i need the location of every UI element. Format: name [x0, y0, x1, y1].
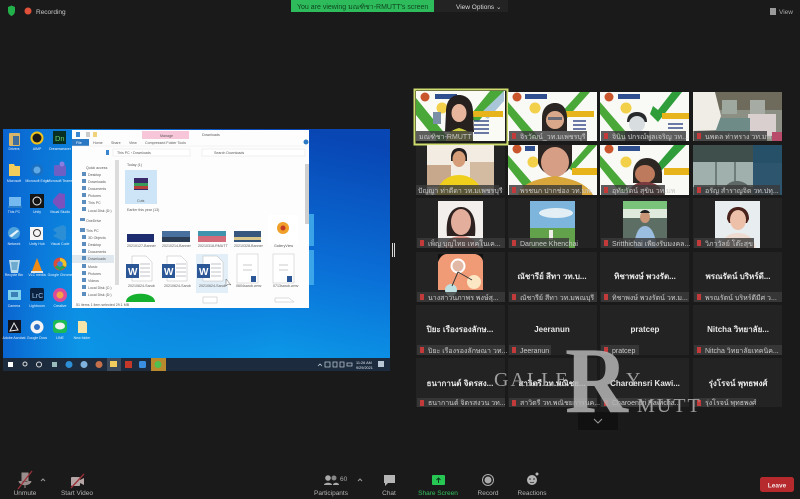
icon: security shield	[8, 6, 15, 16]
desktop icon labels: Visual Code	[51, 242, 69, 246]
ribbon: Share	[111, 141, 121, 145]
desktop icon labels: Adobe Acrobat	[3, 336, 26, 340]
view options button: View Options ⌄	[456, 4, 501, 11]
watermark: Gallery RMUTT	[494, 329, 702, 433]
watermark: Gallery RMUTT: Y	[626, 369, 640, 391]
participant names: จินิน ปกรณ์พูลเจริญ วท...	[612, 133, 688, 141]
navigation sidebar: Videos	[88, 279, 99, 283]
desktop icon labels: Camera	[8, 304, 20, 308]
desktop icon labels: Lightroom	[29, 304, 45, 308]
image thumbnails: 20210328-Banner	[234, 244, 264, 248]
navigation sidebar: 3D Objects	[88, 236, 106, 240]
participant names: พรณรัตน์ บริหร์ดีมีศ ว...	[705, 294, 777, 302]
control: participants: 60	[340, 476, 348, 483]
ribbon: Compressed Folder Tools	[145, 141, 186, 145]
navigation sidebar: Downloads	[88, 180, 106, 184]
address bar: Search Downloads	[214, 151, 244, 155]
image thumbnails: GalleryView	[274, 244, 294, 248]
desktop icon labels: Microsoft Edge	[25, 179, 49, 183]
gallery next page button	[578, 412, 618, 430]
image thumbnails	[127, 215, 298, 248]
participant names: นพดล ท่าทราง วท.มพ	[705, 134, 771, 141]
participant names: ธนากานต์ จิตรสงวน วท...	[428, 399, 506, 407]
control: participants: Participants	[314, 490, 349, 497]
recording label: Recording	[36, 9, 66, 16]
tile: man with mask	[600, 92, 689, 141]
address bar	[72, 146, 309, 156]
navigation sidebar: Local Disk (D:)	[88, 209, 112, 213]
document thumbnails	[126, 254, 299, 293]
participant names: นางสาวนภาพร พงษ์สุ...	[428, 294, 499, 302]
file explorer window	[72, 130, 309, 308]
tile: room with white shirt	[693, 92, 782, 141]
large participant names: Charoensri Kawi...	[610, 379, 680, 388]
participant names: ปัญญา ท่าดีดา วท.มเพชรบุรี	[418, 187, 503, 195]
participant names	[418, 133, 779, 407]
desktop icon labels: This PC	[8, 210, 21, 214]
watermark: Gallery RMUTT: MUTT	[637, 395, 702, 417]
navigation sidebar: Desktop	[88, 173, 101, 177]
large participant names: ธนากานต์ จิตรสง...	[427, 378, 493, 388]
desktop icon labels: New folder	[74, 336, 91, 340]
control: unmute	[14, 471, 45, 497]
navigation sidebar: This PC	[86, 229, 99, 233]
desktop wallpaper	[3, 129, 390, 358]
desktop icons: LrC	[32, 293, 43, 300]
panel: participant gallery	[414, 90, 782, 407]
large participant names: ปิยะ เรืองรองลักษ...	[426, 324, 493, 334]
desktop icon labels: Google Chrome	[48, 273, 72, 277]
desktop icon labels: LINE	[56, 336, 65, 340]
document thumbnails: 0604sarub.wmv	[236, 284, 262, 288]
ribbon: Downloads	[202, 133, 220, 137]
control: start video	[61, 474, 93, 497]
file group: today: Cuts	[137, 199, 145, 203]
tile: window room	[693, 145, 782, 195]
document thumbnails: W	[164, 267, 174, 278]
large participant names: ทิชาพงษ์ พวงรัต...	[614, 271, 676, 281]
document thumbnails: 0713sarub.wmv	[273, 284, 299, 288]
participant names: ปิยะ เรืองรองลักษณา วท...	[428, 347, 507, 355]
participant names: อุทัยรัตน์ สุขิน วท.มพ	[612, 187, 676, 195]
control: chat	[382, 475, 396, 497]
navigation sidebar: This PC	[88, 201, 101, 205]
large participant names: รุ่งโรจน์ พุทธพงศ์	[709, 378, 768, 389]
control: reactions: Reactions	[518, 490, 547, 497]
participant names: ทิชาพงษ์ พวงรัตน์ วท.ม...	[612, 294, 688, 302]
icon: recording dot	[24, 8, 32, 14]
document thumbnails: W	[199, 267, 209, 278]
ribbon: Manage	[160, 134, 173, 138]
panel divider handle	[392, 243, 394, 257]
navigation sidebar: Music	[88, 265, 98, 269]
navigation sidebar: Local Disk (D:)	[88, 293, 112, 297]
desktop icon labels: Network	[8, 242, 21, 246]
ribbon: View	[129, 141, 137, 145]
participant names: Sritthichai เพียงรับมงคล...	[612, 240, 690, 248]
participant names: Charoensri Kawicha...	[612, 400, 681, 407]
file group: today	[125, 163, 159, 212]
ribbon: Home	[93, 141, 103, 145]
tile: woman with glasses in red	[600, 144, 689, 195]
tile: man in blue shirt	[623, 201, 667, 248]
ribbon: File	[76, 141, 82, 145]
navigation sidebar: Documents	[88, 187, 106, 191]
control: reactions	[518, 472, 547, 497]
large participant names	[426, 271, 770, 389]
scrollbar	[305, 164, 309, 224]
control: record: Record	[478, 490, 499, 497]
control: share screen: Share Screen	[418, 490, 458, 497]
desktop icon labels: Drivers	[8, 147, 20, 151]
participant names: อรัญ สำราญจิต วท.ปทุ...	[705, 187, 779, 195]
navigation sidebar: Documents	[88, 250, 106, 254]
desktop icon labels: VLC media	[28, 273, 46, 277]
desktop icon labels: Creative	[53, 304, 67, 308]
desktop icon labels	[3, 147, 91, 340]
participant names: จิรวัฒน์_วท.มเพชรบุรี	[520, 133, 586, 141]
participant names: Darunee Khenchai	[520, 241, 578, 248]
desktop icon labels: Unity	[33, 210, 41, 214]
participant names: วิภาวัลย์ โต๊ะสุข	[705, 239, 753, 248]
tile: man in yellow shirt	[427, 145, 494, 195]
control: start video: Start Video	[61, 490, 93, 497]
tile backgrounds	[416, 92, 782, 407]
desktop icon labels: AIMP	[33, 147, 42, 151]
viewing banner: You are viewing มณฑิชา-RMUTT's screen	[297, 3, 428, 11]
participant names: สาวิตรี วท.พณิชยการนค...	[520, 399, 600, 407]
document thumbnails: W	[128, 267, 138, 278]
large participant names: Jeeranun	[534, 325, 570, 334]
viewing banner	[291, 0, 434, 12]
address bar: This PC › Downloads	[117, 151, 151, 155]
control: leave button	[760, 477, 794, 492]
document thumbnails: 20210624-Sarub	[164, 284, 191, 288]
tile: close-up woman in yellow	[508, 144, 597, 195]
tile: rice field photo	[530, 201, 575, 248]
view options button	[434, 0, 508, 12]
participant names: รุ่งโรจน์ พุทธพงศ์	[705, 398, 757, 407]
control: participants	[314, 475, 362, 497]
desktop icon labels: Dreamweaver	[49, 147, 72, 151]
participant names: pratcep	[612, 348, 635, 355]
windows taskbar	[3, 358, 390, 371]
large participant names: pratcep	[631, 325, 660, 334]
desktop icons	[8, 131, 87, 334]
navigation sidebar: Pictures	[88, 272, 101, 276]
file group: today: Today (1)	[127, 163, 142, 167]
document thumbnails: 20210624-Sarub	[199, 284, 226, 288]
large participant names: สาวิตรี วท.พณิชย...	[518, 378, 586, 388]
navigation sidebar: Local Disk (C:)	[88, 286, 112, 290]
panel: shared screen	[3, 129, 390, 371]
image thumbnails: 20210214-Banner	[162, 244, 192, 248]
control: record	[478, 474, 499, 497]
navigation sidebar: Downloads	[88, 257, 106, 261]
desktop icon labels: Unity Hub	[29, 242, 45, 246]
navigation sidebar	[72, 160, 119, 297]
muted microphone icons	[420, 133, 701, 406]
windows taskbar: 9/29/2021	[356, 366, 373, 370]
tile: avatar network graphic	[438, 254, 483, 296]
document thumbnails: 20210624-Sarub	[128, 284, 155, 288]
tile: smiling woman	[438, 201, 483, 248]
navigation sidebar: Desktop	[88, 243, 101, 247]
desktop icon labels: Microsoft	[7, 179, 21, 183]
desktop icons: Dn	[55, 134, 65, 143]
participant names: Nitcha วิทยาลัยเทคนิค...	[705, 347, 779, 355]
participant names: พรชนก ปากช่อง วท.มพ.	[520, 188, 593, 195]
participant name bars	[416, 131, 782, 407]
desktop icon labels: Microsoft Teams	[47, 179, 73, 183]
participant names: ณัชารีย์ สีทา วท.มพณบุรี	[520, 294, 594, 302]
participant names: มณฑิชา-RMUTT	[419, 133, 472, 141]
view toggle	[770, 8, 793, 16]
top status bar	[8, 0, 793, 16]
watermark: Gallery RMUTT: R	[565, 329, 629, 433]
control: chat: Chat	[382, 490, 396, 497]
watermark: Gallery RMUTT: GALLE	[494, 369, 570, 391]
large participant names: Nitcha วิทยาลัย...	[707, 325, 769, 334]
participant names: Jeeranun	[520, 348, 549, 355]
desktop icon labels: Visual Studio	[50, 210, 70, 214]
navigation sidebar: OneDrive	[86, 219, 101, 223]
windows taskbar: 11:26 AM	[356, 361, 372, 365]
navigation sidebar: Quick access	[86, 166, 108, 170]
ribbon	[72, 131, 308, 146]
partial bottom row icons	[126, 294, 294, 303]
status bar: 51 items 1 item selected 29.1 MB	[76, 303, 130, 307]
large participant names: พรณรัตน์ บริหร์ดี...	[706, 271, 770, 281]
desktop icon labels: Recycle Bin	[5, 273, 23, 277]
tile: host speaking with slide background	[414, 90, 508, 144]
control: leave button: Leave	[768, 482, 787, 490]
image thumbnails: 20210318-RMUTT	[198, 244, 229, 248]
control: unmute: Unmute	[14, 490, 37, 497]
desktop icon labels: Google Docs	[27, 336, 47, 340]
view toggle: View	[779, 9, 793, 16]
file group: today: Earlier this year (13)	[127, 208, 159, 212]
navigation sidebar: Pictures	[88, 194, 101, 198]
meeting toolbar	[14, 471, 794, 497]
image thumbnails: 20210127-Banner	[127, 244, 157, 248]
participant names: เพ็ญ บุญไทย เทคโนเค...	[428, 239, 501, 248]
tile: woman with glasses	[508, 92, 597, 141]
control: share screen	[418, 475, 458, 497]
tile: woman with glasses in white room	[715, 201, 760, 248]
large participant names: ณัชารีย์ สีทา วท.บ...	[517, 271, 587, 281]
